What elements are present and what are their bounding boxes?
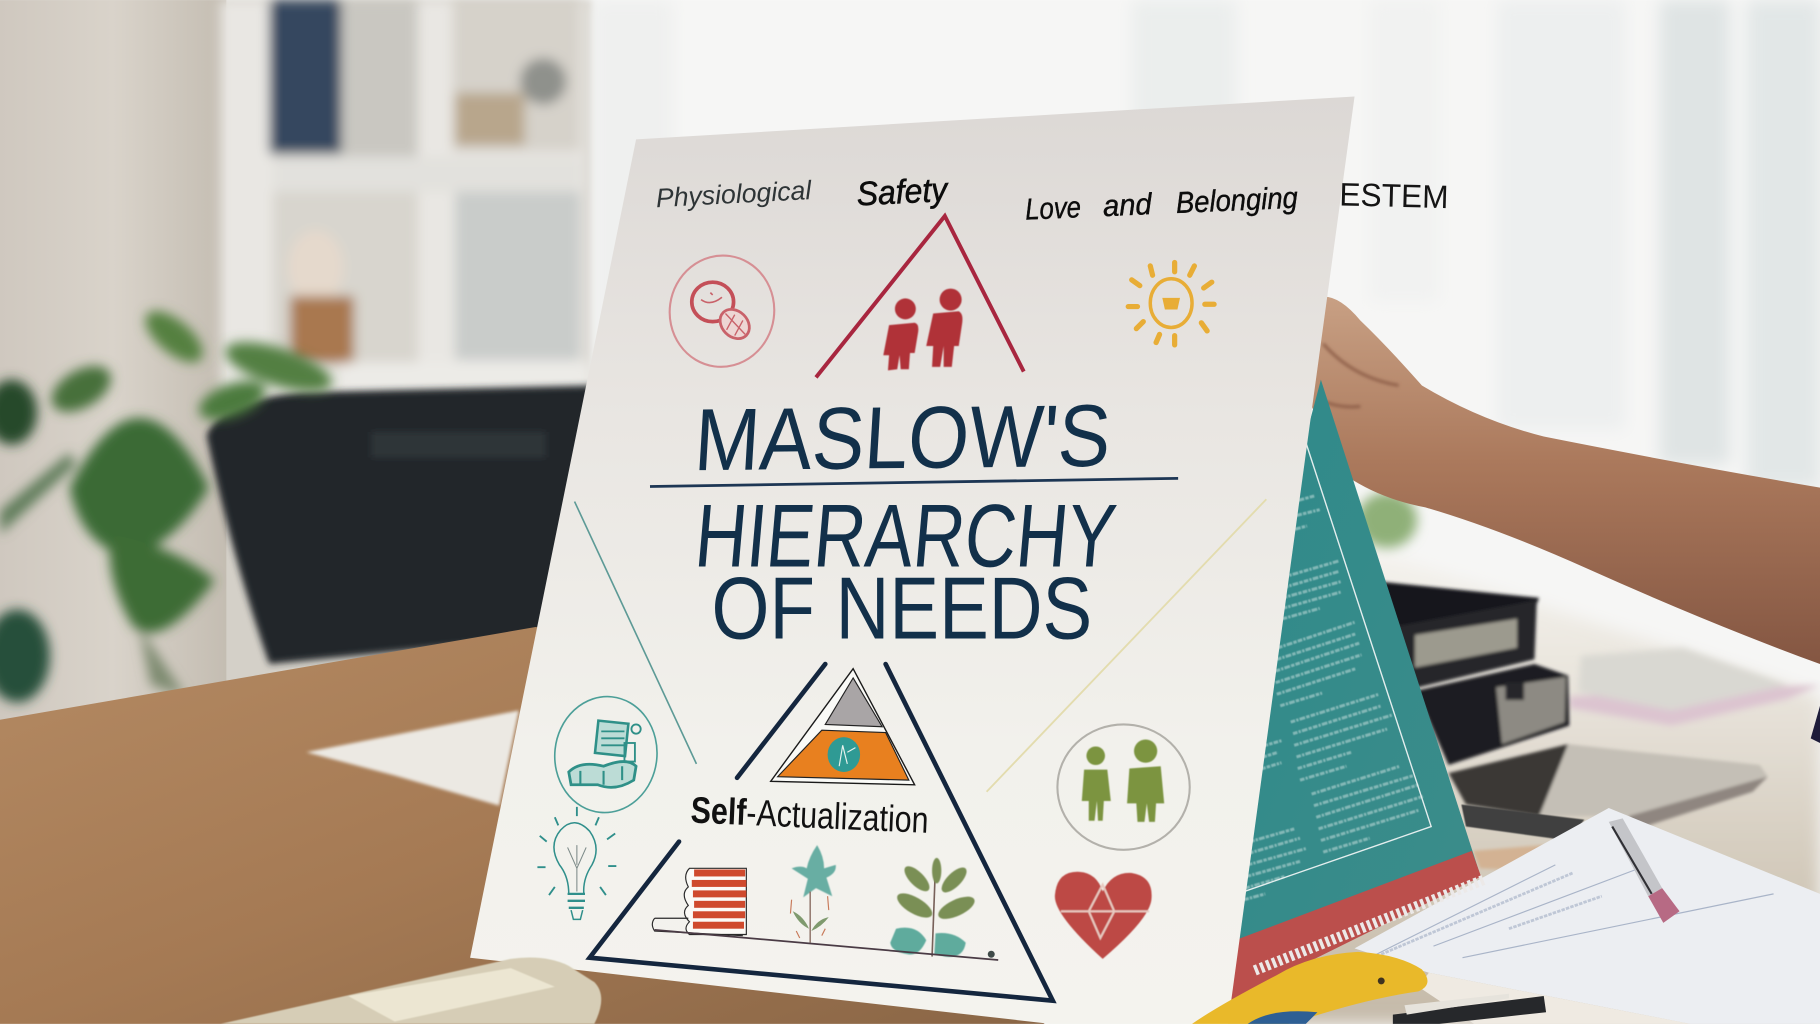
heading: Love and Belonging: Love [1025, 191, 1082, 227]
yellow clip [1192, 952, 1427, 1024]
small page copy [1244, 496, 1423, 900]
icon: grey circle with olive people [1057, 724, 1190, 850]
dark object at right edge [1811, 706, 1820, 743]
title divider line [650, 478, 1178, 486]
pyramid summit [771, 669, 915, 785]
yellow diagonal accent line [987, 499, 1266, 792]
large navy pyramid outline [590, 664, 1053, 1001]
black storage box [1380, 582, 1539, 690]
icon: green sprout with teal leaves [890, 858, 995, 958]
heading: Physiological: Physiological [655, 175, 813, 213]
heading: Love and Belonging: and [1102, 188, 1154, 223]
green plant behind poster [1357, 492, 1417, 548]
icon: light bulb [537, 807, 616, 919]
poster board [470, 96, 1355, 1024]
camera [1416, 664, 1569, 765]
right side table surface [1207, 546, 1820, 1024]
beige ruler case [221, 958, 601, 1024]
icon: teal circle with books and papers [549, 692, 663, 818]
wooden table [0, 627, 1045, 1024]
title: Maslow's: MASLOW'S [692, 386, 1114, 489]
teal diagonal accent line [575, 502, 696, 764]
icon: red heart with diamond [1055, 872, 1152, 959]
pink pen [1609, 818, 1680, 923]
heading: Safety: Safety [856, 172, 950, 214]
dark pen on table [1461, 804, 1584, 840]
grey top tier [825, 678, 882, 727]
black clip on desk [1393, 994, 1546, 1024]
heading: Love and Belonging [1025, 182, 1299, 227]
black chair [207, 385, 592, 664]
teal emblem [828, 737, 860, 772]
red person right [926, 289, 962, 367]
pink magazine [1569, 648, 1820, 726]
icon: stack of red books [652, 868, 746, 936]
notebook spiral [1255, 880, 1483, 970]
icon: teal flower [790, 845, 836, 943]
heading: ESTEM: ESTEM [1339, 176, 1449, 215]
red band [1223, 851, 1481, 1004]
title: Of Needs: OF NEEDS [712, 559, 1092, 658]
orange wedge under notebook [1473, 845, 1544, 871]
tablet [1449, 744, 1768, 831]
bookshelf [221, 0, 592, 395]
label: Self-Actualization: Self-Actualization [690, 789, 929, 841]
notebook with notes [1355, 808, 1820, 1024]
arm and hand [1312, 297, 1820, 664]
teal back page [1223, 380, 1481, 1004]
orange tier [778, 730, 909, 780]
white inset border [1241, 442, 1431, 893]
title: Hierarchy: HIERARCHY [691, 486, 1120, 586]
ground line of pyramid scene [655, 930, 998, 960]
red person left [883, 298, 918, 370]
icon: safety triangle with people [816, 216, 1024, 377]
icon: physiological circle with food [662, 249, 781, 374]
icon: sun [1128, 262, 1214, 345]
paper on table [306, 710, 519, 806]
heading: Love and Belonging: Belonging [1175, 182, 1299, 220]
plant [0, 302, 337, 702]
